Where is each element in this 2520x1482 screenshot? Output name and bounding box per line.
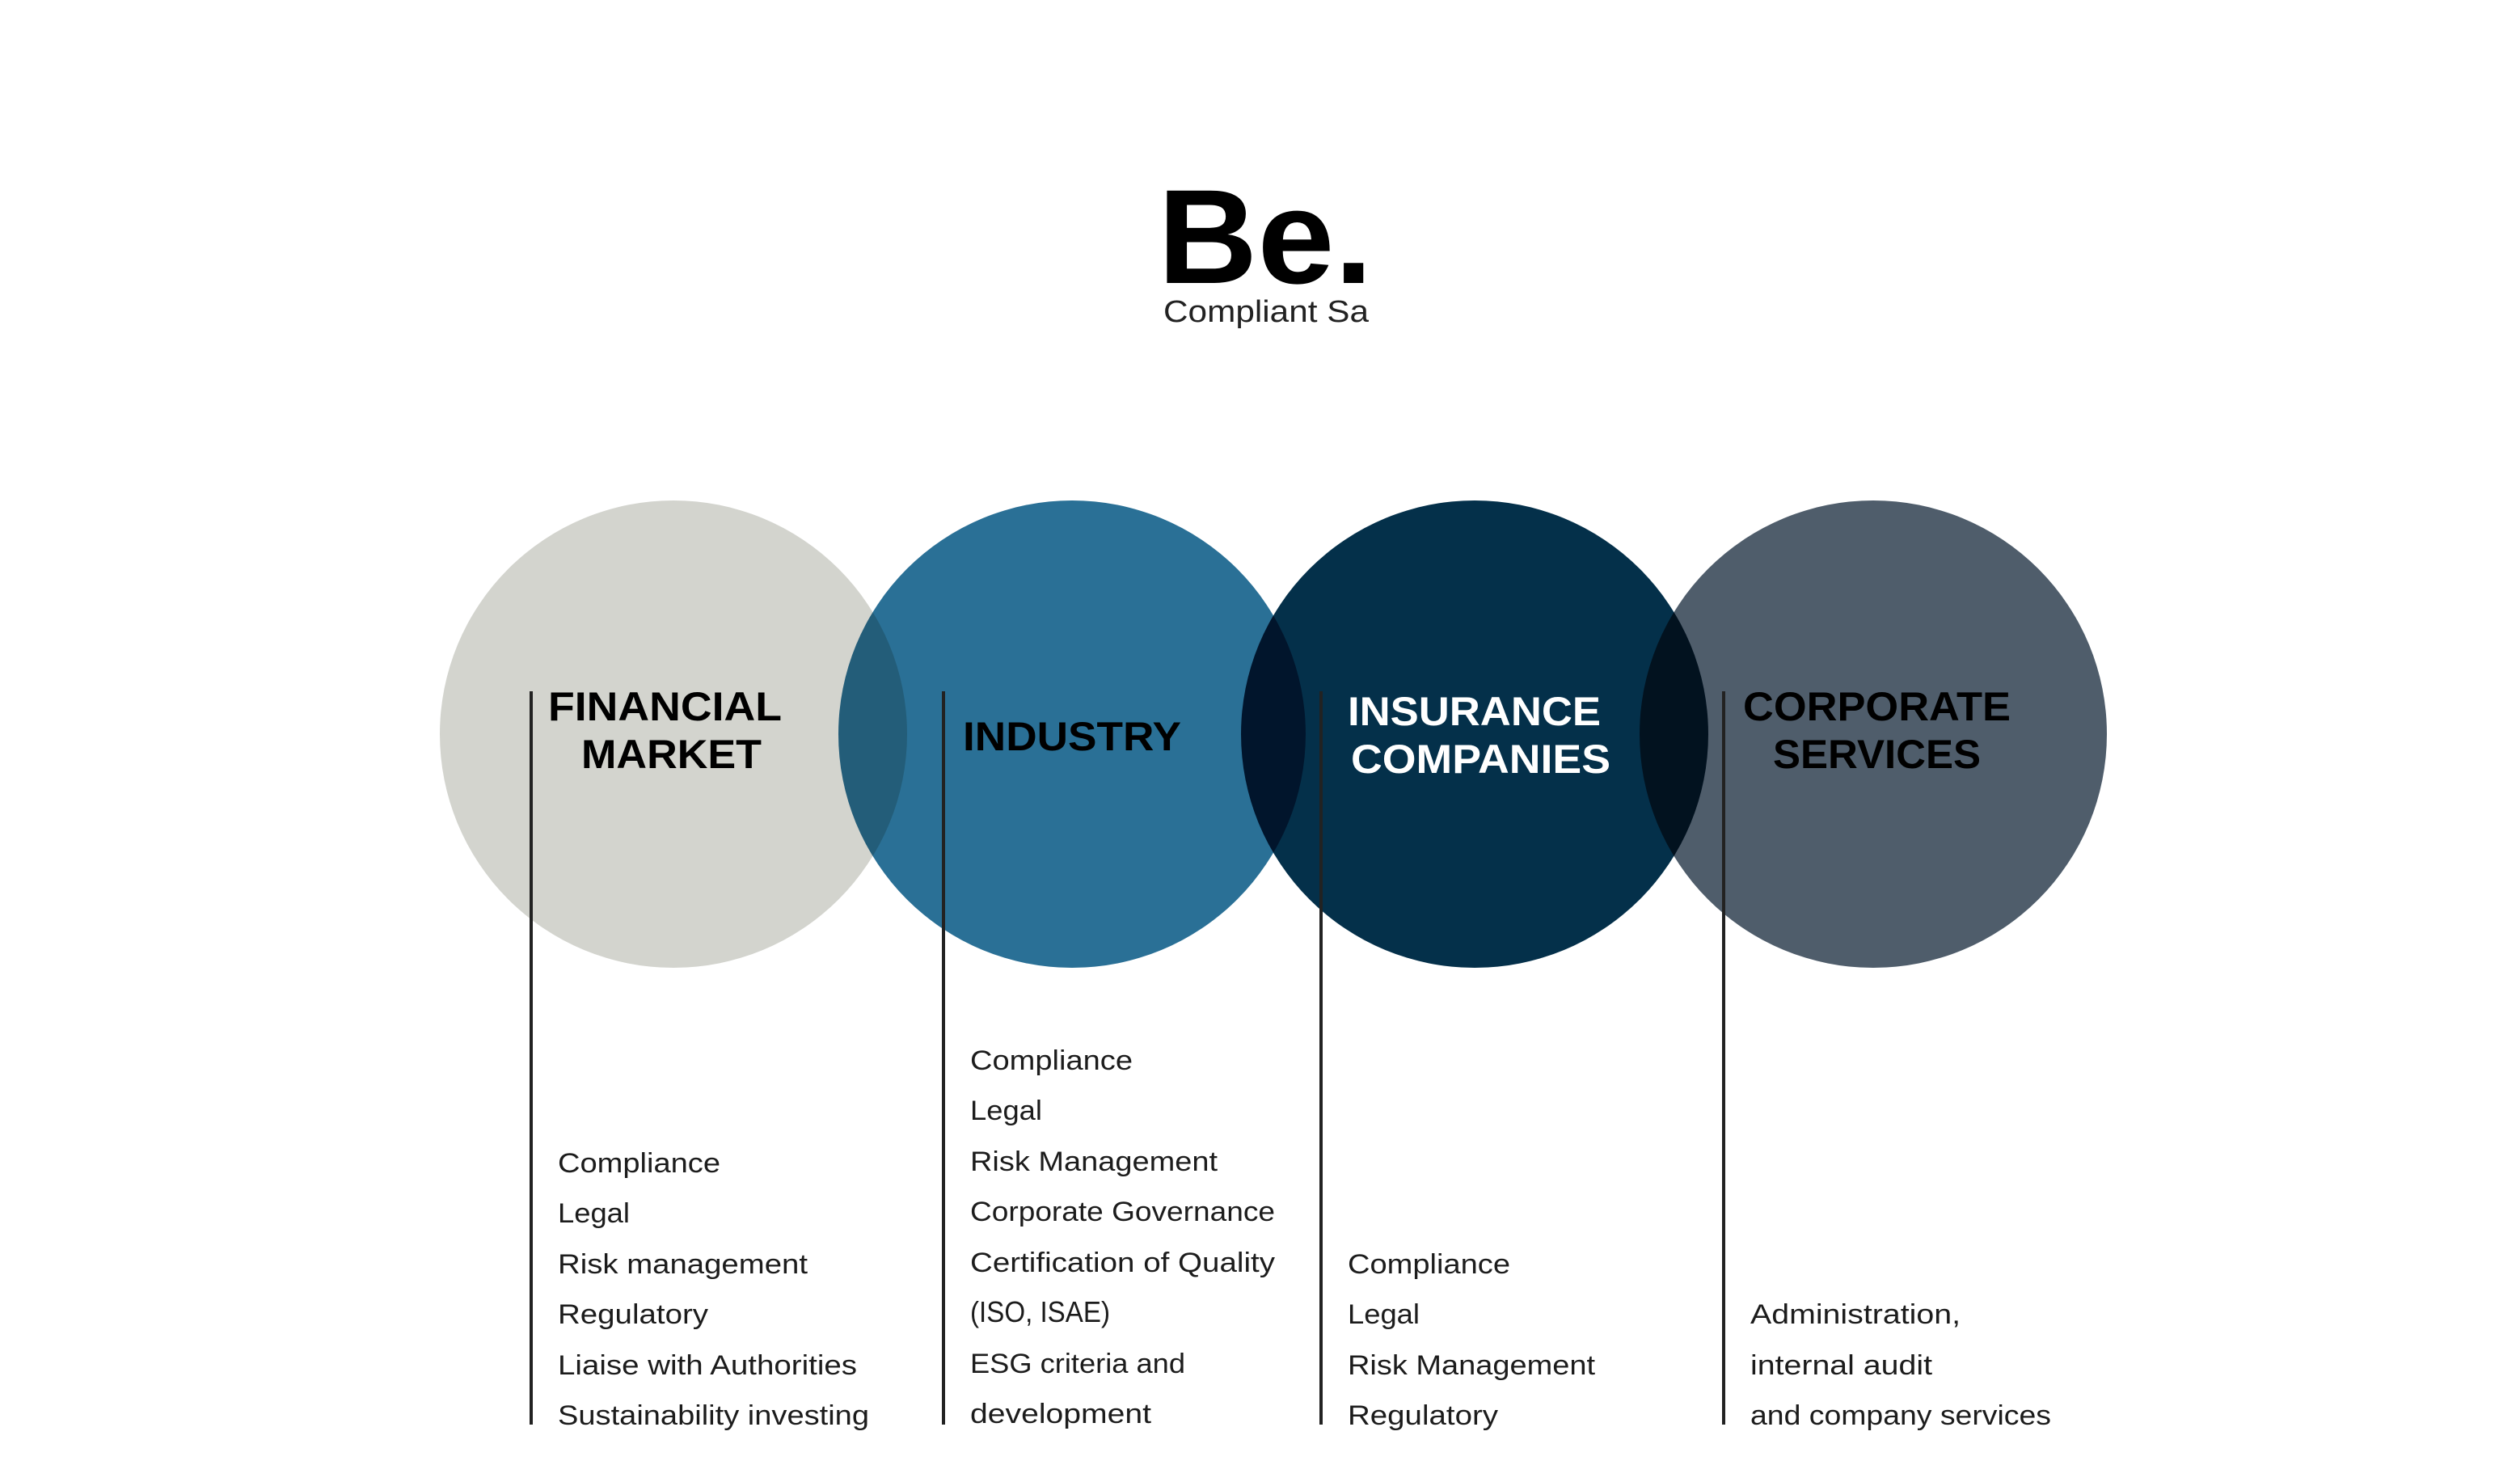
list: Legal [970,1096,1042,1126]
list: Corporate Governance [970,1197,1275,1227]
logo subtitle: Compliant Sa [1163,295,1370,329]
column: industry [942,691,1275,1429]
list: Regulatory [558,1299,708,1330]
list: Compliance [558,1148,720,1179]
heading: INDUSTRY [963,714,1181,759]
heading: INSURANCE [1348,689,1601,734]
overlapping circles [440,500,2107,968]
list: ESG criteria and [970,1349,1185,1379]
list: Regulatory [1348,1400,1498,1431]
heading [1743,684,2011,777]
list: Compliance [970,1045,1133,1076]
list: development [970,1399,1152,1429]
circle: insurance companies [1241,500,1708,968]
heading: CORPORATE [1743,684,2011,729]
heading: FINANCIAL [548,684,782,729]
list: Sustainability investing [558,1400,869,1431]
column: insurance companies [1319,689,1610,1431]
circle: corporate services [1640,500,2107,968]
list: Liaise with Authorities [558,1350,857,1381]
vertical line [1319,691,1323,1425]
column: financial market [530,684,869,1431]
logo wordmark: Be. [1158,163,1373,312]
column: corporate services [1722,684,2051,1431]
heading [548,684,782,777]
list [970,1045,1275,1429]
list [558,1148,869,1431]
heading [1348,689,1610,782]
list: Administration, [1750,1299,1961,1330]
list [1750,1299,2051,1431]
vertical line [942,691,945,1425]
list: and company services [1750,1400,2051,1431]
heading: SERVICES [1773,732,1981,777]
heading: COMPANIES [1351,737,1610,782]
circle: financial market [440,500,907,968]
list: Legal [558,1198,630,1229]
heading: MARKET [581,732,762,777]
list: Certification of Quality [970,1248,1275,1278]
list: Risk Management [970,1146,1218,1177]
logo [1158,163,1373,329]
list: internal audit [1750,1350,1933,1381]
vertical line [1722,691,1725,1425]
vertical line [530,691,533,1425]
list [1348,1249,1596,1431]
list: Risk Management [1348,1350,1596,1381]
list: Legal [1348,1299,1420,1330]
list: (ISO, ISAE) [970,1295,1110,1328]
list: Risk management [558,1249,808,1280]
list: Compliance [1348,1249,1510,1280]
circle: industry [838,500,1306,968]
